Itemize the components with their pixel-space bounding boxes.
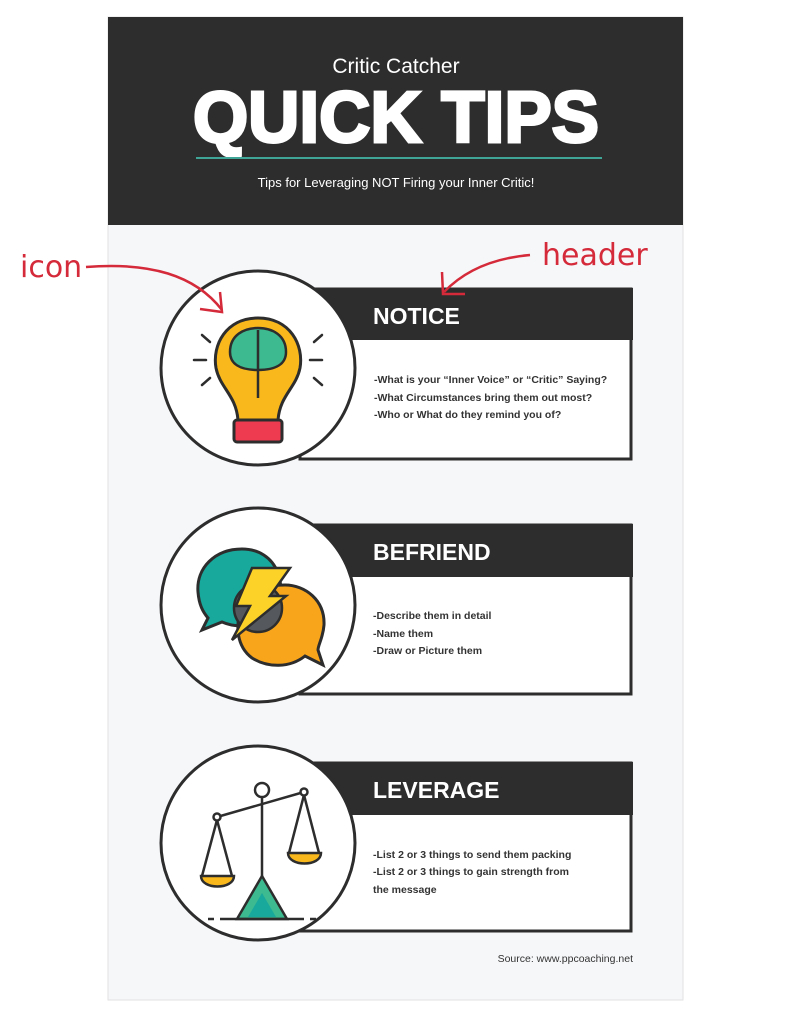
notice text [374,374,607,421]
title: QUICK TIPS: QUICK TIPS [193,78,599,158]
icon circle: lightbulb [161,271,355,465]
subtitle: Critic Catcher: Critic Catcher [332,55,460,78]
annotation: icon [20,250,222,312]
leverage text [373,849,571,896]
befriend text: -Describe them in detail [373,610,492,622]
leverage text: -List 2 or 3 things to gain strength from [373,866,569,878]
notice box [300,289,631,459]
leverage text: the message [373,884,437,896]
notice text: -What is your “Inner Voice” or “Critic” Saying? [374,374,607,386]
tagline: Tips for Leveraging NOT Firing your Inner Critic! [258,175,534,190]
befriend text: -Name them [373,628,433,640]
heading: NOTICE: NOTICE [373,303,460,329]
annotation: icon: icon [20,250,82,285]
icon circle: balance scale [161,746,355,940]
befriend box [300,525,631,694]
befriend text [373,610,492,657]
heading: LEVERAGE: LEVERAGE [373,777,500,803]
notice text: -Who or What do they remind you of? [374,409,561,421]
panel: befriend [161,508,633,702]
leverage text: -List 2 or 3 things to send them packing [373,849,571,861]
notice text: -What Circumstances bring them out most? [374,392,592,404]
heading: BEFRIEND: BEFRIEND [373,539,491,565]
annotation: header: header [542,238,648,273]
header band [108,17,683,225]
teal divider line [196,157,602,159]
panel: leverage [161,746,633,940]
source: Source: www.ppcoaching.net [498,953,633,965]
icon circle: chat bubbles with lightning [161,508,355,702]
annotation: header [442,238,648,294]
card background [108,17,683,1000]
panel: notice [161,271,633,465]
leverage box [300,763,631,931]
befriend text: -Draw or Picture them [373,645,482,657]
